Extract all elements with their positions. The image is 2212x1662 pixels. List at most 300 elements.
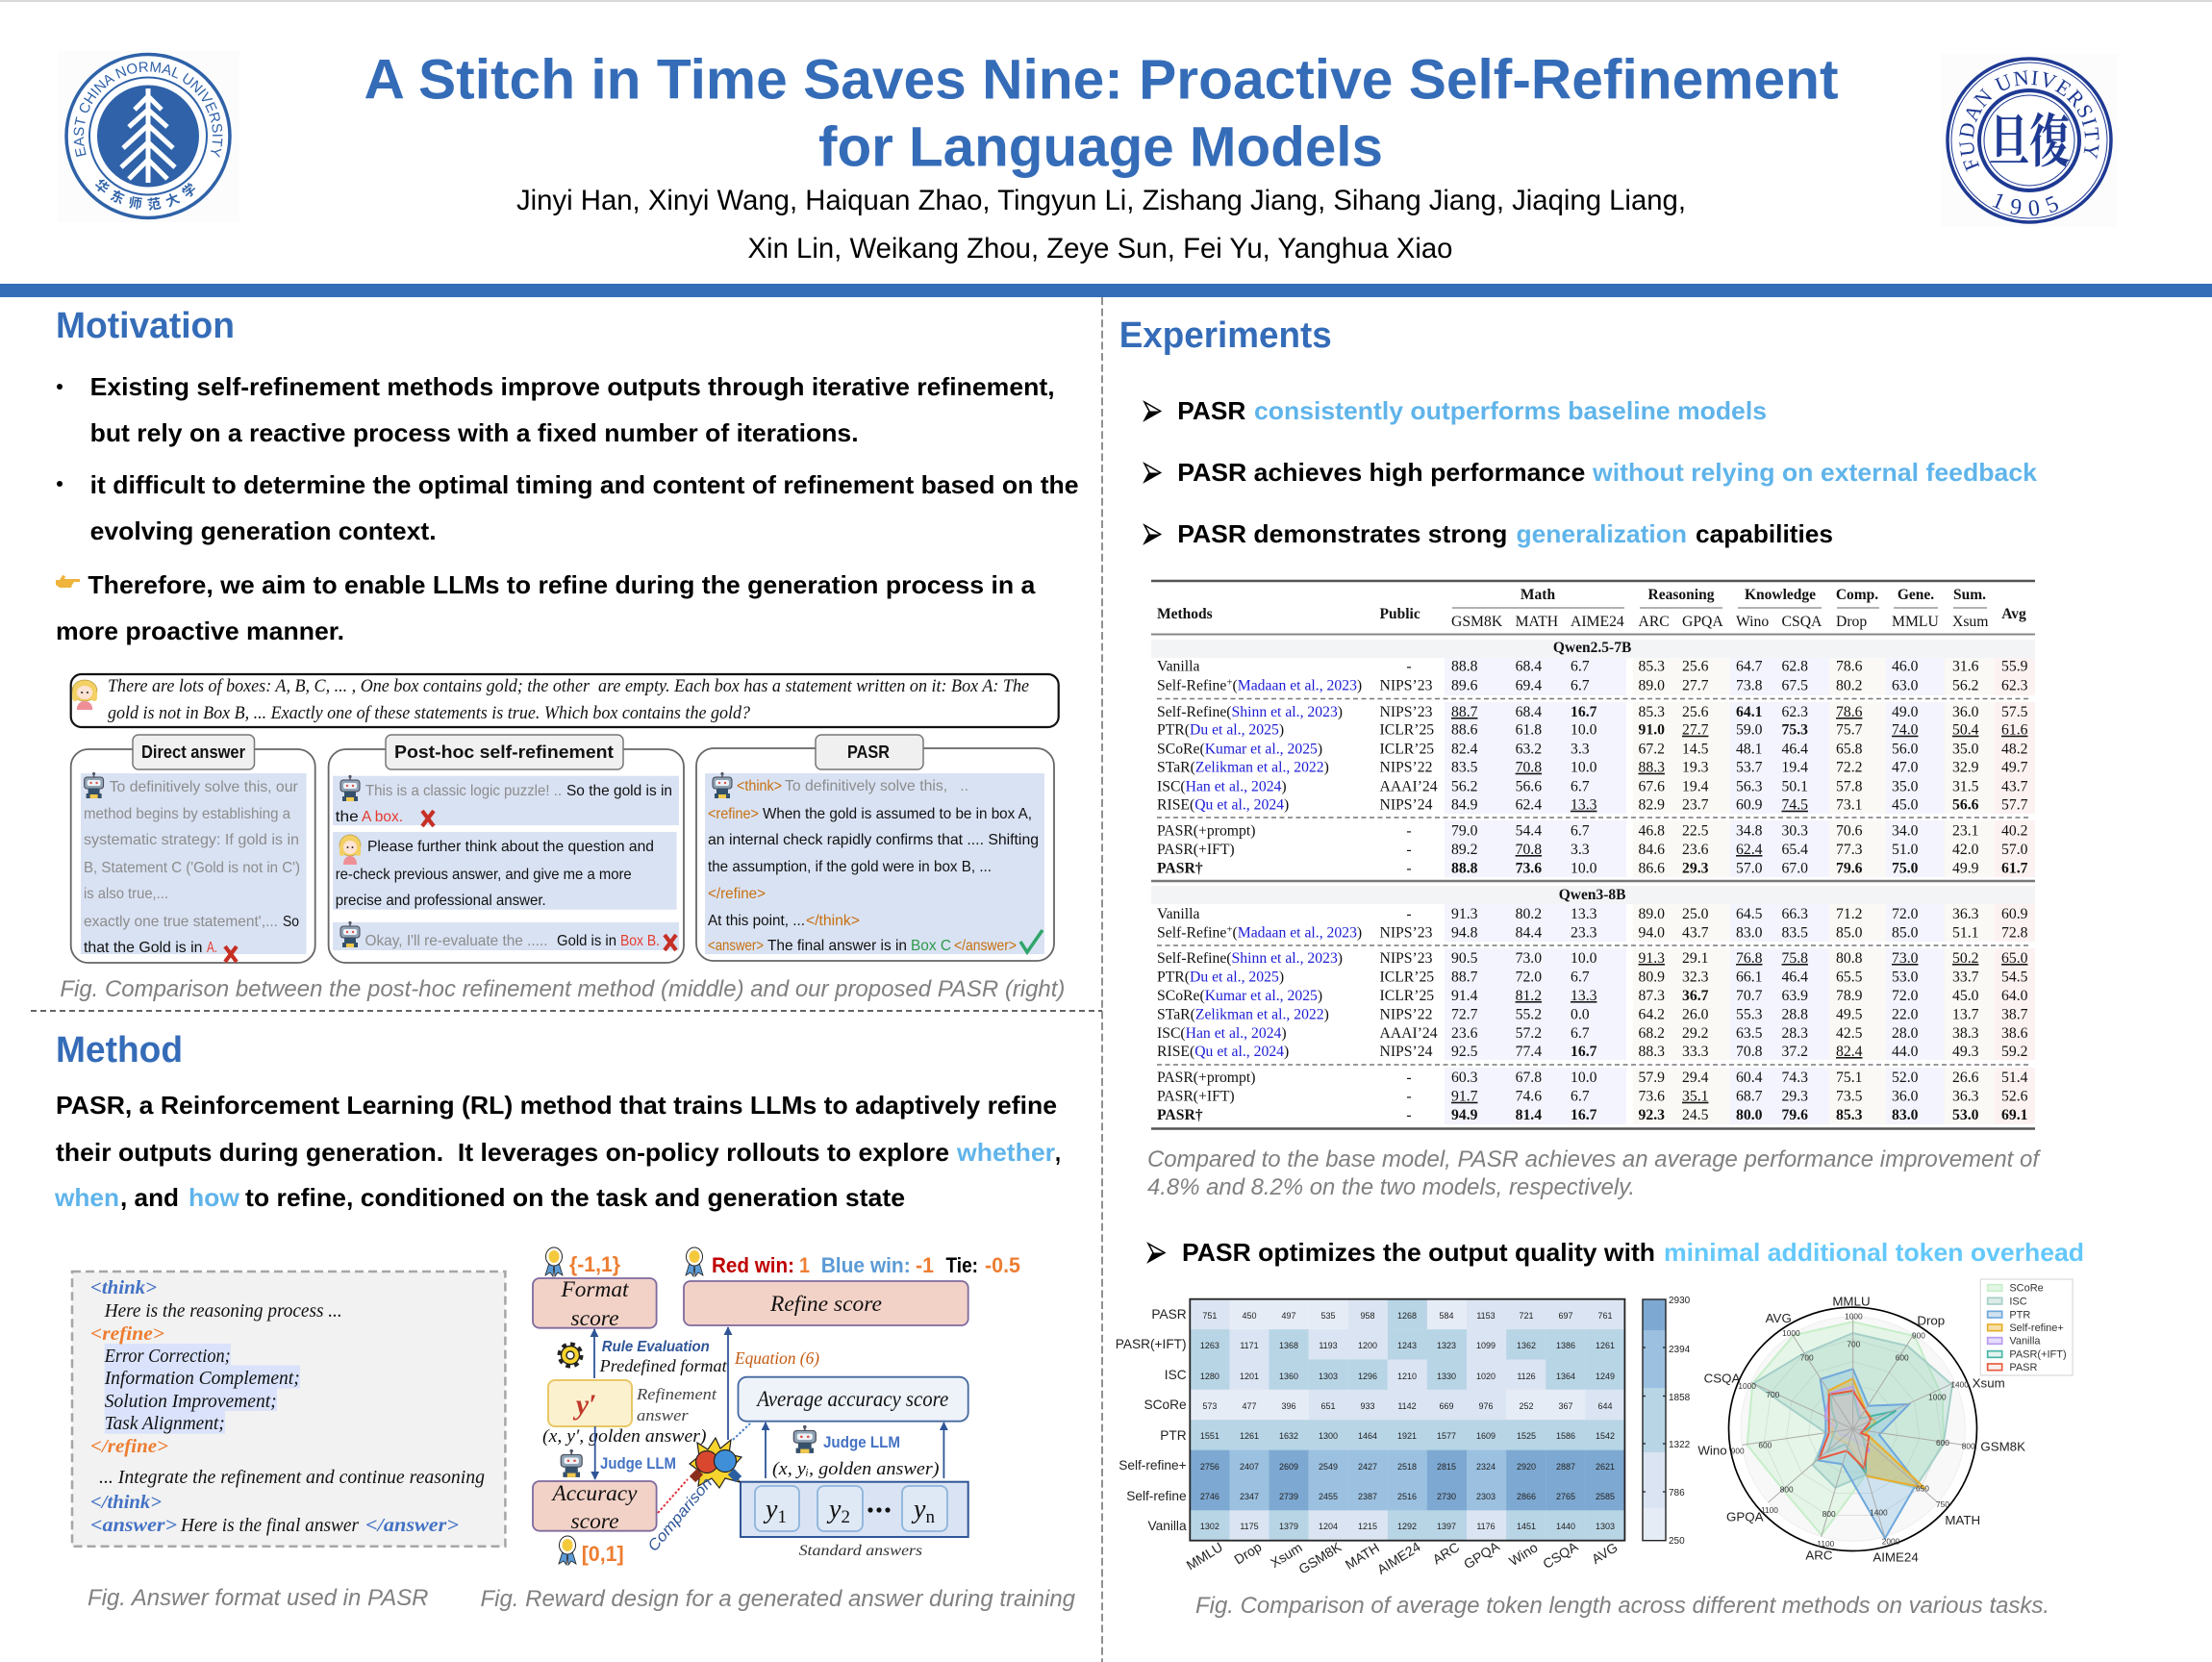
panel: PASR: </answer> (954, 938, 1017, 954)
panel: direct answer: exactly one true statement',... (84, 914, 278, 930)
heatmap colorbar (1643, 1296, 1691, 1547)
heatmap values: 1204 (1319, 1522, 1338, 1531)
heatmap values: 2455 (1319, 1492, 1338, 1501)
panel: direct answer: systematic strategy: If gold is in (84, 832, 299, 848)
text block: method description: to refine, conditioned on the task and generation state (245, 1183, 905, 1212)
table rows: Qwen3-8B: 26.0 (1682, 1007, 1709, 1023)
table rows: Qwen2.5-7B: 67.5 (1781, 677, 1808, 693)
icon: medal and refine rewards: Blue win: (821, 1253, 911, 1277)
heatmap values: 2920 (1517, 1462, 1536, 1472)
box: average accuracy score: Average accuracy score (755, 1387, 948, 1411)
table rows: Qwen3-8B: 59.2 (2001, 1044, 2027, 1060)
heatmap values: 2866 (1517, 1492, 1536, 1501)
table rows: Qwen3-8B: NIPS’23 (1379, 950, 1433, 967)
horizontal section divider (31, 1010, 1102, 1012)
table rows: Qwen3-8B: - (1406, 1107, 1412, 1123)
format text: Error Correction; (104, 1346, 231, 1367)
box: standard answers: n (925, 1507, 935, 1527)
table rows: Qwen3-8B: 83.0 (1892, 1107, 1919, 1123)
table rows: Qwen2.5-7B: Zelikman et al., 2022) (1195, 760, 1329, 776)
table rows: Qwen2.5-7B: 85.3 (1639, 704, 1665, 720)
score box: format: score (571, 1306, 619, 1330)
label: standard answers: Standard answers (799, 1543, 922, 1559)
top gray strip (0, 0, 2212, 2)
table rows: Qwen3-8B: 45.0 (1952, 988, 1979, 1004)
heatmap column labels: MMLU (1184, 1539, 1225, 1573)
table rows: Qwen2.5-7B: 70.6 (1836, 822, 1863, 839)
logo: East China Normal University (64, 52, 232, 219)
table rows: Qwen2.5-7B: 63.0 (1892, 677, 1919, 693)
table rows: Qwen2.5-7B: 75.0 (1892, 860, 1919, 876)
caption: table summary (1147, 1146, 2041, 1200)
heading: Experiments: Experiments (1119, 315, 1332, 356)
table rows: Qwen3-8B: 42.5 (1836, 1025, 1863, 1042)
panel: PASR: To definitively solve this, .. (785, 778, 968, 794)
heatmap values: 1249 (1596, 1372, 1615, 1381)
table rows: Qwen2.5-7B: 61.7 (2001, 860, 2028, 876)
heatmap values: 1153 (1476, 1311, 1496, 1321)
radar legend: Vanilla (2009, 1336, 2041, 1347)
highlighted refinement types (105, 1344, 300, 1434)
table rows: Qwen3-8B: ICLR’25 (1379, 969, 1434, 985)
icon: gear (560, 1345, 581, 1366)
band: Qwen2.5-7B: Qwen2.5-7B (1553, 640, 1631, 656)
series: ISC (1753, 1333, 1952, 1488)
panel: motivation (56, 306, 1079, 645)
heatmap values: 1330 (1437, 1372, 1456, 1381)
table rows: Qwen3-8B: 38.7 (2001, 1007, 2028, 1023)
table rows: Qwen2.5-7B: Han et al., 2024) (1186, 778, 1287, 794)
text block: method description: , and (120, 1183, 179, 1212)
table rows: Qwen2.5-7B: RISE( (1157, 797, 1194, 814)
table rows: Qwen2.5-7B: PASR† (1157, 860, 1203, 876)
table header: Math (1521, 587, 1555, 603)
radar axis labels: AIME24 (1873, 1549, 1919, 1564)
figure: method comparison (60, 674, 1065, 1002)
radar tick labels: 800 (1780, 1484, 1794, 1494)
panel: direct answer: B, Statement C ('Gold is not in C') (84, 860, 300, 876)
table rows: Qwen2.5-7B: 73.1 (1836, 797, 1862, 814)
panel: PASR: </refine> (708, 886, 766, 902)
table rows: Qwen2.5-7B: 85.3 (1639, 659, 1665, 675)
table rules (1151, 581, 2035, 1129)
heatmap values: 497 (1281, 1311, 1296, 1321)
heatmap values: 697 (1558, 1311, 1573, 1321)
heatmap values: 1397 (1437, 1522, 1456, 1531)
table rows: Qwen2.5-7B: 27.7 (1682, 722, 1709, 739)
heading: Method: Method (56, 1030, 183, 1070)
table rows: Qwen2.5-7B: 22.5 (1682, 822, 1709, 839)
table rows: Qwen3-8B: 68.2 (1639, 1025, 1665, 1042)
heatmap values: 1302 (1200, 1522, 1219, 1531)
heatmap row labels (1116, 1307, 1187, 1533)
bullet: outperforms baselines: PASR (1177, 396, 1246, 425)
arrow: comparison to refine score (727, 1327, 729, 1440)
table rows: Qwen3-8B: ISC( (1157, 1025, 1186, 1042)
table rows: Qwen3-8B: Self-Refine( (1157, 950, 1232, 967)
caption: answer format: Fig. Answer format used in PASR (88, 1585, 429, 1611)
table rows: Qwen2.5-7B: 19.3 (1682, 760, 1709, 776)
table rows: Qwen3-8B: Kumar et al., 2025) (1205, 988, 1322, 1004)
table rows: Qwen2.5-7B: 16.7 (1571, 704, 1597, 720)
heatmap values: 1360 (1279, 1372, 1298, 1381)
icon: medal and refine rewards: Tie: (946, 1253, 978, 1277)
table rows: Qwen2.5-7B: 23.6 (1682, 842, 1709, 858)
series: Vanilla (1824, 1387, 1871, 1452)
table rows: Qwen3-8B: 92.5 (1451, 1044, 1478, 1060)
logo: Fudan University: 1905 (1993, 194, 2058, 215)
table rows: Qwen2.5-7B: 67.0 (1781, 860, 1808, 876)
label: refinement answer: answer (637, 1406, 689, 1424)
table header: Public (1379, 606, 1420, 622)
table rows: Qwen2.5-7B: 57.7 (2001, 797, 2028, 814)
bullet: token overhead: minimal additional token overhead (1664, 1238, 2084, 1267)
table rows: Qwen2.5-7B: 84.9 (1451, 797, 1478, 814)
box: standard answers: y (914, 1495, 925, 1524)
box: standard answers: y (766, 1495, 777, 1524)
table header: GPQA (1682, 614, 1723, 630)
table rows: Qwen2.5-7B: 78.6 (1836, 704, 1863, 720)
table rows: Qwen2.5-7B: 49.0 (1892, 704, 1919, 720)
radar tick labels: 1000 (1845, 1311, 1863, 1321)
heatmap values: 1176 (1476, 1522, 1496, 1531)
heatmap values: 1551 (1200, 1431, 1219, 1441)
table rows: Qwen3-8B: 83.0 (1736, 924, 1763, 941)
icon: medal and refine rewards: -1 (916, 1253, 934, 1277)
table rows: Qwen2.5-7B: 35.0 (1952, 741, 1979, 757)
table rows: Qwen3-8B: 88.7 (1451, 969, 1478, 985)
icon: boxing clash (690, 1438, 742, 1488)
heatmap values: 2746 (1200, 1492, 1219, 1501)
radar tick labels: 800 (1962, 1441, 1975, 1450)
table rows: Qwen2.5-7B: 70.8 (1516, 842, 1542, 858)
heatmap values: 2518 (1397, 1462, 1417, 1472)
table rows: Qwen3-8B: ICLR’25 (1379, 988, 1434, 1004)
table rows: Qwen3-8B: 29.3 (1781, 1089, 1808, 1105)
heatmap colorbar: 2394 (1669, 1345, 1691, 1355)
heatmap row labels: SCoRe (1144, 1398, 1187, 1412)
table rows: Qwen2.5-7B: 49.9 (1952, 860, 1979, 876)
score box: accuracy: score (571, 1509, 619, 1533)
table rows: Qwen3-8B: 94.0 (1639, 924, 1665, 941)
table rows: Qwen2.5-7B: 80.2 (1836, 677, 1862, 693)
caption: comparison figure: Fig. Comparison between the post-hoc refinement method (middle) and our proposed PASR (right) (60, 976, 1065, 1002)
text block: method description: how (189, 1183, 240, 1212)
table rows: Qwen3-8B: 63.5 (1736, 1025, 1763, 1042)
table rows: Qwen3-8B: 55.2 (1516, 1007, 1542, 1023)
table rows: Qwen3-8B: 28.8 (1781, 1007, 1808, 1023)
radar grid (1741, 1317, 1965, 1541)
table header: Wino (1736, 614, 1769, 630)
table rows: Qwen3-8B: 33.3 (1682, 1044, 1709, 1060)
heatmap values: 761 (1597, 1311, 1613, 1321)
heatmap values: 2765 (1556, 1492, 1575, 1501)
table rows: Qwen2.5-7B: 3.3 (1571, 741, 1590, 757)
table rows: Qwen3-8B: 13.3 (1571, 906, 1597, 922)
table rows: Qwen3-8B: 91.4 (1451, 988, 1478, 1004)
heatmap values: 1386 (1556, 1341, 1575, 1350)
table rows: Qwen2.5-7B: 88.7 (1451, 704, 1478, 720)
label: judge LLM left: Judge LLM (600, 1454, 676, 1473)
table rows: Qwen3-8B: 82.4 (1836, 1044, 1863, 1060)
table rows: Qwen3-8B: 64.5 (1736, 906, 1763, 922)
table rows: Qwen2.5-7B: - (1406, 842, 1412, 858)
table rows: Qwen3-8B: 78.9 (1836, 988, 1863, 1004)
table rows: Qwen2.5-7B: Madaan et al., 2023) (1238, 677, 1362, 693)
bullet: token overhead: PASR optimizes the output quality with (1182, 1238, 1655, 1267)
table header: Drop (1836, 614, 1867, 630)
table rows: Qwen2.5-7B: 68.4 (1516, 704, 1542, 720)
table rows: Qwen3-8B: - (1406, 906, 1412, 922)
panel: PASR: <think> (737, 778, 782, 794)
table rows: Qwen2.5-7B: 64.1 (1736, 704, 1763, 720)
heatmap colorbar: 786 (1669, 1488, 1685, 1498)
panel: PASR: the assumption, if the gold were in box B, ... (708, 859, 992, 875)
table header: Reasoning (1648, 587, 1715, 603)
table rows: Qwen2.5-7B: 48.1 (1736, 741, 1762, 757)
table rows: Qwen3-8B: 87.3 (1639, 988, 1665, 1004)
table rows: Qwen2.5-7B: 79.0 (1451, 822, 1478, 839)
table rows: Qwen2.5-7B: 88.8 (1451, 860, 1478, 876)
radar axis labels (1697, 1294, 2025, 1564)
heatmap row labels: PASR (1151, 1307, 1187, 1322)
table rows: Qwen3-8B: 72.0 (1892, 906, 1919, 922)
logo: East China Normal University: EAST CHINA NORMAL UNIVERSITY (73, 62, 223, 158)
table rows: Qwen3-8B: 32.3 (1682, 969, 1709, 985)
label: rule evaluation: Predefined format (599, 1356, 728, 1375)
table header: Methods (1157, 606, 1213, 622)
table rows: Qwen2.5-7B: AAAI’24 (1379, 778, 1438, 794)
box: standard answers: 2 (841, 1507, 850, 1527)
table rows: Qwen2.5-7B: 34.0 (1892, 822, 1919, 839)
table rows: Qwen2.5-7B: ICLR’25 (1379, 722, 1434, 739)
heatmap values: 450 (1242, 1311, 1257, 1321)
arrows: standard answers to average score (766, 1423, 943, 1478)
table rows: Qwen2.5-7B: 88.6 (1451, 722, 1478, 739)
table rows: Qwen3-8B: Du et al., 2025) (1190, 969, 1284, 985)
radar tick labels: 700 (1847, 1339, 1861, 1348)
format text: <think> (90, 1277, 157, 1298)
table rows: Qwen3-8B: 51.4 (2001, 1070, 2028, 1086)
table rows: Qwen2.5-7B: 31.5 (1952, 778, 1979, 794)
heatmap values: 2407 (1240, 1462, 1259, 1472)
heatmap values: 1210 (1397, 1372, 1417, 1381)
table rows: Qwen2.5-7B: 53.7 (1736, 760, 1763, 776)
panel: direct answer (71, 735, 315, 963)
table rows: Qwen3-8B: 90.5 (1451, 950, 1478, 967)
column shading (1443, 658, 2037, 1124)
table rows: Qwen2.5-7B: NIPS’24 (1379, 797, 1433, 814)
score box: format: Format (560, 1277, 629, 1301)
table rows: Qwen2.5-7B: 89.0 (1639, 677, 1665, 693)
label: comparison: Comparison (645, 1475, 716, 1555)
table rows: Qwen2.5-7B: 46.0 (1892, 659, 1919, 675)
series: SCoRe (1747, 1322, 1944, 1535)
panel: direct answer: that the Gold is in (84, 940, 202, 956)
table rows: Qwen3-8B: 94.9 (1451, 1107, 1478, 1123)
heatmap values: 2739 (1279, 1492, 1298, 1501)
figure: reward design (481, 1247, 1076, 1612)
heatmap colorbar: 1858 (1669, 1393, 1691, 1403)
radar tick labels: 1000 (1928, 1392, 1947, 1401)
band: Qwen3-8B (1151, 886, 2035, 904)
radar axis labels: GPQA (1726, 1510, 1764, 1524)
format text: Solution Improvement; (105, 1391, 277, 1412)
table rows: Qwen3-8B: 72.7 (1451, 1007, 1478, 1023)
icon: medal and format range: {-1,1} (569, 1252, 620, 1276)
heatmap values: 573 (1202, 1401, 1217, 1411)
table rows: Qwen2.5-7B: 49.7 (2001, 760, 2028, 776)
table rows: Qwen3-8B: 22.0 (1892, 1007, 1919, 1023)
table rows: Qwen3-8B: 16.7 (1571, 1107, 1597, 1123)
table rows: Qwen2.5-7B: 62.3 (2001, 677, 2028, 693)
table rows: Qwen2.5-7B: 56.2 (1451, 778, 1477, 794)
table rows: Qwen3-8B: 50.2 (1952, 950, 1978, 967)
table rows: Qwen3-8B: 52.0 (1892, 1070, 1919, 1086)
title: for Language Models (818, 116, 1383, 179)
table rows: Qwen2.5-7B: Vanilla (1157, 659, 1199, 675)
panel: PASR: At this point, ... (708, 913, 805, 929)
table rows: Qwen2.5-7B: NIPS’22 (1379, 760, 1432, 776)
panel: PASR: <refine> (708, 806, 759, 822)
table rows: Qwen3-8B: 68.7 (1736, 1089, 1763, 1105)
table rows: Qwen3-8B: Madaan et al., 2023) (1238, 924, 1362, 941)
table rows: Qwen3-8B: 36.0 (1892, 1089, 1919, 1105)
table rows: Qwen3-8B: 73.0 (1516, 950, 1542, 967)
radar tick labels: 600 (1896, 1353, 1909, 1363)
bullet: generalization: capabilities (1696, 519, 1833, 548)
heatmap values: 1632 (1279, 1431, 1298, 1441)
table rows: Qwen3-8B: 75.1 (1836, 1070, 1862, 1086)
table rows: Qwen3-8B: 81.2 (1516, 988, 1542, 1004)
header (64, 49, 2113, 264)
header band (0, 284, 2212, 297)
table rows: Qwen3-8B: 36.7 (1682, 988, 1709, 1004)
heatmap values: 2427 (1358, 1462, 1377, 1472)
table rows: Qwen3-8B: 89.0 (1639, 906, 1665, 922)
table rows: Qwen2.5-7B: 36.0 (1952, 704, 1979, 720)
panel: post-hoc self-refinement: Post-hoc self-refinement (394, 743, 614, 762)
caption: reward design: Fig. Reward design for a generated answer during training (481, 1586, 1076, 1612)
heatmap values: 1921 (1397, 1431, 1417, 1441)
radar axis labels: Xsum (1973, 1376, 2005, 1391)
radar tick labels: 900 (1731, 1446, 1745, 1455)
format text: Here is the final answer (180, 1515, 359, 1536)
panel: method (54, 1030, 1061, 1212)
table header: MATH (1516, 614, 1558, 630)
table rows: Qwen3-8B: PTR( (1157, 969, 1190, 985)
radar tick labels: 900 (1912, 1330, 1925, 1340)
table rows: Qwen2.5-7B: 73.8 (1736, 677, 1763, 693)
heatmap values: 1243 (1397, 1341, 1417, 1350)
table rows: Qwen3-8B: 79.6 (1781, 1107, 1808, 1123)
bullet: outperforms baselines: consistently outperforms baseline models (1254, 396, 1767, 425)
panel: direct answer: Direct answer (141, 743, 245, 762)
table rows: Qwen2.5-7B: NIPS’23 (1379, 704, 1433, 720)
heatmap values: 669 (1439, 1401, 1454, 1411)
table rows: Qwen3-8B: Shinn et al., 2023) (1232, 950, 1343, 967)
table rows: Qwen3-8B: RISE( (1157, 1044, 1194, 1060)
table rows: Qwen2.5-7B: PASR(+IFT) (1157, 842, 1235, 858)
table header: Gene. (1898, 587, 1934, 603)
table rows: Qwen2.5-7B: 62.4 (1516, 797, 1542, 814)
heatmap values: 2516 (1397, 1492, 1417, 1501)
table rows: Qwen2.5-7B: 91.0 (1639, 722, 1665, 739)
radar legend: PASR (2009, 1362, 2037, 1373)
logo: Fudan University (1946, 57, 2113, 224)
box: standard answers: y (829, 1495, 841, 1524)
table rows: Qwen2.5-7B: Qu et al., 2024) (1194, 797, 1289, 814)
panel: PASR: <answer> (708, 938, 764, 954)
table rows: Qwen2.5-7B: 65.4 (1781, 842, 1808, 858)
panel: post-hoc self-refinement: Box B. (620, 933, 660, 949)
table rows: Qwen3-8B: NIPS’22 (1379, 1007, 1432, 1023)
heatmap column labels: Xsum (1268, 1539, 1305, 1571)
heatmap row labels: Self-refine (1126, 1489, 1187, 1503)
table rows: Qwen2.5-7B: 56.3 (1736, 778, 1763, 794)
table rows: Qwen2.5-7B: 6.7 (1571, 677, 1590, 693)
table rows: Qwen3-8B: PASR† (1157, 1107, 1203, 1123)
panel: post-hoc self-refinement: Okay, I'll re-evaluate the ..... (365, 933, 548, 949)
table rows: Qwen2.5-7B: 59.0 (1736, 722, 1763, 739)
caption: table summary: 4.8% and 8.2% on the two models, respectively. (1147, 1174, 1635, 1200)
panel: post-hoc self-refinement: A box. (362, 809, 403, 825)
table rows: Qwen2.5-7B: 6.7 (1571, 778, 1590, 794)
table rows: Qwen2.5-7B: 74.0 (1892, 722, 1919, 739)
table header: Sum. (1953, 587, 1986, 603)
table rows: Qwen3-8B: 72.0 (1516, 969, 1542, 985)
icon: medal and accuracy range (559, 1536, 624, 1566)
table rows: Qwen3-8B: 46.4 (1781, 969, 1808, 985)
format text: <answer> (90, 1515, 177, 1536)
table rows: Qwen3-8B: Qu et al., 2024) (1194, 1044, 1289, 1060)
heatmap column labels: GPQA (1461, 1538, 1502, 1572)
table rows: Qwen3-8B: 75.8 (1781, 950, 1808, 967)
table rows: Qwen2.5-7B: 48.2 (2001, 741, 2027, 757)
table rows: Qwen2.5-7B: 40.2 (2001, 822, 2027, 839)
radar tick labels: 650 (1916, 1484, 1929, 1494)
table rows: Qwen3-8B: 13.3 (1571, 988, 1597, 1004)
table rows: Qwen3-8B: NIPS’24 (1379, 1044, 1433, 1060)
question box: There are lots of boxes: A, B, C, ... , One box contains gold; the other are empty. Each box has a statement written on it: Box A: The (108, 676, 1029, 696)
label: judge LLM right: Judge LLM (823, 1433, 900, 1451)
table rows: Qwen3-8B: 60.9 (2001, 906, 2028, 922)
table rows: Qwen2.5-7B: 75.7 (1836, 722, 1863, 739)
table rows: Qwen2.5-7B: 54.4 (1516, 822, 1542, 839)
table rows: Qwen3-8B: 66.1 (1736, 969, 1762, 985)
table rows: Qwen2.5-7B: 42.0 (1952, 842, 1979, 858)
panel: experiments (1119, 315, 2038, 548)
bullet: generalization: PASR demonstrates strong (1177, 519, 1507, 548)
table rows: Qwen3-8B: 64.0 (2001, 988, 2028, 1004)
table rows: Qwen3-8B: 29.2 (1682, 1025, 1708, 1042)
icon: medal and refine rewards: Red win: (712, 1253, 794, 1277)
table rows: Qwen3-8B: - (1406, 1089, 1412, 1105)
table rows: Qwen2.5-7B: 70.8 (1516, 760, 1542, 776)
bullet: generalization (1144, 519, 1833, 548)
table rows: Qwen3-8B: 38.3 (1952, 1025, 1979, 1042)
table rows: Qwen2.5-7B: 73.6 (1516, 860, 1542, 876)
table header (1157, 587, 2026, 630)
table rows: Qwen2.5-7B: 65.8 (1836, 741, 1863, 757)
box: y prime (548, 1380, 632, 1426)
bullet: token overhead (1148, 1238, 2084, 1267)
text block: motivation bullets: but rely on a reactive process with a fixed number of iterations. (90, 418, 859, 447)
heatmap values: 2324 (1476, 1462, 1496, 1472)
authors: Xin Lin, Weikang Zhou, Zeye Sun, Fei Yu, Yanghua Xiao (748, 233, 1452, 264)
table header: Xsum (1952, 614, 1988, 630)
table rows: Qwen3-8B: 10.0 (1571, 1070, 1597, 1086)
